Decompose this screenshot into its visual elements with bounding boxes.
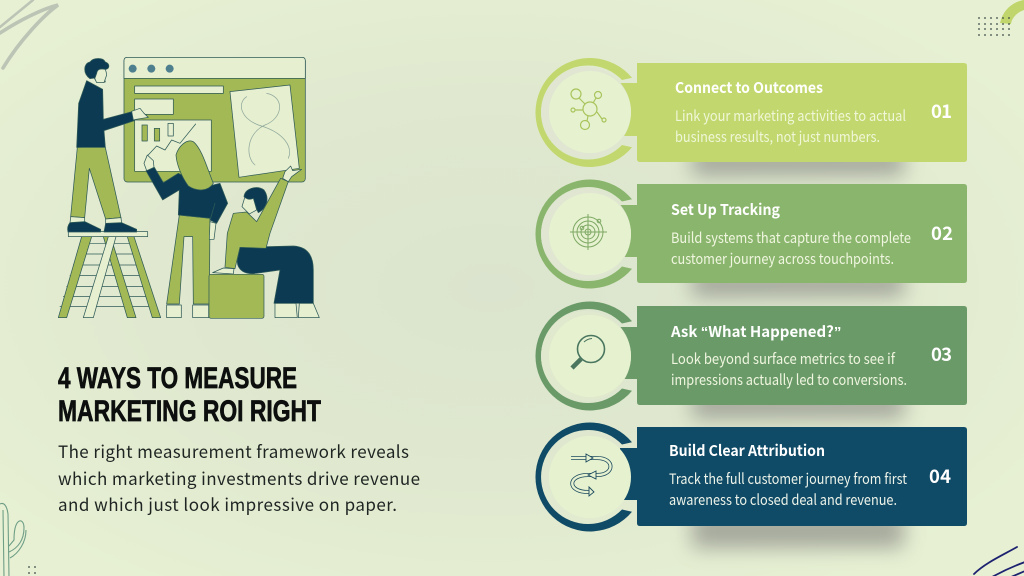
panel: step 1 connect to outcomes: Connect to Outcomes bbox=[675, 77, 823, 98]
decoration: corner arc and dots top right bbox=[978, 0, 1024, 36]
panel: step 3 ask what happened: impressions actually led to conversions. bbox=[671, 369, 907, 390]
panel: step 3 ask what happened: Look beyond surface metrics to see if bbox=[671, 348, 896, 369]
panel: step 4 build clear attribution: awareness to closed deal and revenue. bbox=[669, 489, 897, 510]
heading bbox=[58, 362, 321, 428]
panel: step 1 connect to outcomes: Link your marketing activities to actual bbox=[675, 105, 906, 126]
decoration: navy strokes bottom right bbox=[974, 547, 1024, 576]
panel: step 4 build clear attribution: Build Clear Attribution bbox=[669, 440, 825, 461]
icon: magnifying glass bbox=[572, 336, 604, 368]
intro paragraph: The right measurement framework reveals bbox=[58, 438, 409, 463]
panel: step 3 ask what happened: Ask “What Happened?” bbox=[670, 321, 841, 342]
panel: step 1 connect to outcomes: 01 bbox=[931, 98, 952, 124]
seated woman on box bbox=[209, 166, 319, 318]
panel: step 2 set up tracking: customer journey across touchpoints. bbox=[671, 248, 894, 269]
decoration: grey scribble top left bbox=[0, 0, 58, 68]
panel: step 4 build clear attribution bbox=[535, 422, 967, 548]
heading: MARKETING ROI RIGHT bbox=[58, 395, 321, 428]
ladder bbox=[58, 232, 161, 318]
woman with long hair bbox=[144, 141, 228, 318]
panel: step 3 ask what happened: 03 bbox=[931, 341, 952, 367]
man on ladder bbox=[68, 58, 148, 232]
intro paragraph bbox=[58, 438, 420, 516]
panel: step 2 set up tracking: Build systems that capture the complete bbox=[671, 227, 911, 248]
panel: step 1 connect to outcomes bbox=[535, 58, 967, 176]
decoration: cactus bottom left bbox=[0, 503, 26, 576]
panel: step 2 set up tracking: Set Up Tracking bbox=[671, 199, 780, 220]
panel: step 3 ask what happened bbox=[535, 301, 967, 419]
panel: step 4 build clear attribution: Track the full customer journey from first bbox=[669, 468, 907, 489]
panel: step 2 set up tracking bbox=[535, 180, 967, 297]
panel: step 2 set up tracking: 02 bbox=[931, 220, 953, 246]
panel: step 1 connect to outcomes: business results, not just numbers. bbox=[675, 126, 880, 147]
icon: radar target bbox=[570, 214, 607, 250]
decoration: small dots bottom left bbox=[28, 566, 36, 574]
intro paragraph: which marketing investments drive revenue bbox=[58, 465, 420, 490]
icon: network nodes bbox=[571, 89, 606, 130]
panel: step 4 build clear attribution: 04 bbox=[929, 463, 951, 489]
illustration: team working at a web dashboard bbox=[58, 57, 319, 318]
heading: 4 WAYS TO MEASURE bbox=[58, 362, 297, 395]
icon: winding journey arrows bbox=[571, 454, 610, 496]
intro paragraph: and which just look impressive on paper. bbox=[58, 491, 397, 516]
browser window bbox=[124, 57, 305, 182]
